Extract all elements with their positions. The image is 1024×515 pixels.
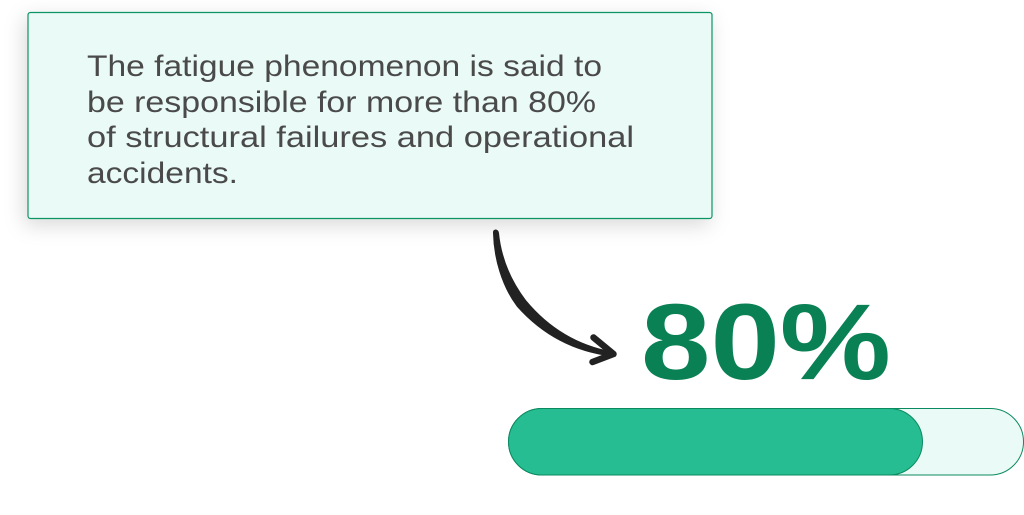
text block: fatigue statement [87, 50, 634, 190]
progress track [508, 408, 1024, 475]
heading: 80 percent figure: 80% [641, 281, 891, 402]
arrow: callout to percentage [493, 230, 614, 362]
progress bar: 80 percent filled [508, 408, 1024, 475]
text block: fatigue statement: of structural failures and operational [87, 121, 634, 154]
text block: fatigue statement: accidents. [87, 157, 238, 190]
panel: callout box [28, 12, 712, 218]
progress fill [508, 408, 922, 475]
text block: fatigue statement: The fatigue phenomenon is said to [87, 50, 602, 83]
text block: fatigue statement: be responsible for more than 80% [87, 86, 596, 119]
